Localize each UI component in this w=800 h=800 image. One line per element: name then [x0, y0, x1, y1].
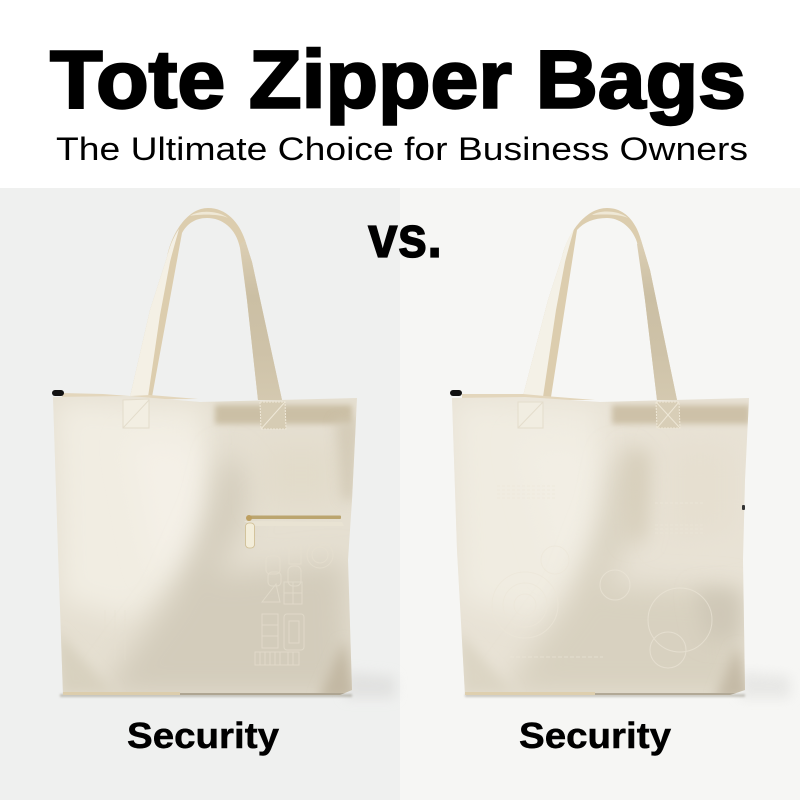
- handle: [523, 208, 677, 400]
- left strap patch: [518, 402, 543, 428]
- tone-on-tone print: [105, 542, 333, 665]
- bag without zipper pocket (right): [450, 208, 790, 700]
- handle top sheen: [190, 212, 228, 218]
- handle cream front strap: [523, 229, 574, 397]
- bag inner rim: [62, 393, 198, 400]
- handle base shape: [523, 208, 677, 400]
- right strap patch: [656, 402, 680, 428]
- right bag label: Security: [519, 715, 671, 756]
- left bag label: Security: [127, 715, 279, 756]
- zipper pull: [246, 523, 254, 548]
- panel: right bag backdrop: [400, 188, 800, 800]
- handle top sheen: [592, 212, 628, 218]
- tone-on-tone print: [492, 486, 712, 668]
- right strap patch: [260, 402, 286, 429]
- handle cream front strap: [130, 229, 179, 397]
- subtitle: The Ultimate Choice for Business Owners: [56, 131, 748, 167]
- side zipper tab: [742, 505, 745, 510]
- bag inner rim: [462, 394, 595, 400]
- bag with zipper pocket (left): [52, 208, 395, 700]
- body shading: [55, 400, 360, 700]
- handle right strap: [637, 240, 677, 400]
- bag body: [53, 396, 357, 695]
- panel: left bag backdrop: [0, 188, 400, 800]
- floor shadow: [465, 672, 790, 698]
- left strap patch: [123, 399, 149, 428]
- title: Tote Zipper Bags: [50, 34, 746, 126]
- versus label: vs.: [368, 205, 442, 270]
- floor shadow: [60, 672, 395, 698]
- zipper end: [52, 390, 64, 396]
- body shading: [452, 400, 750, 700]
- handle right strap: [240, 240, 282, 400]
- handle: [130, 208, 282, 400]
- handle base shape: [130, 208, 282, 400]
- bag body: [452, 397, 749, 695]
- zipper end: [450, 390, 462, 396]
- zipper pocket: [244, 515, 344, 548]
